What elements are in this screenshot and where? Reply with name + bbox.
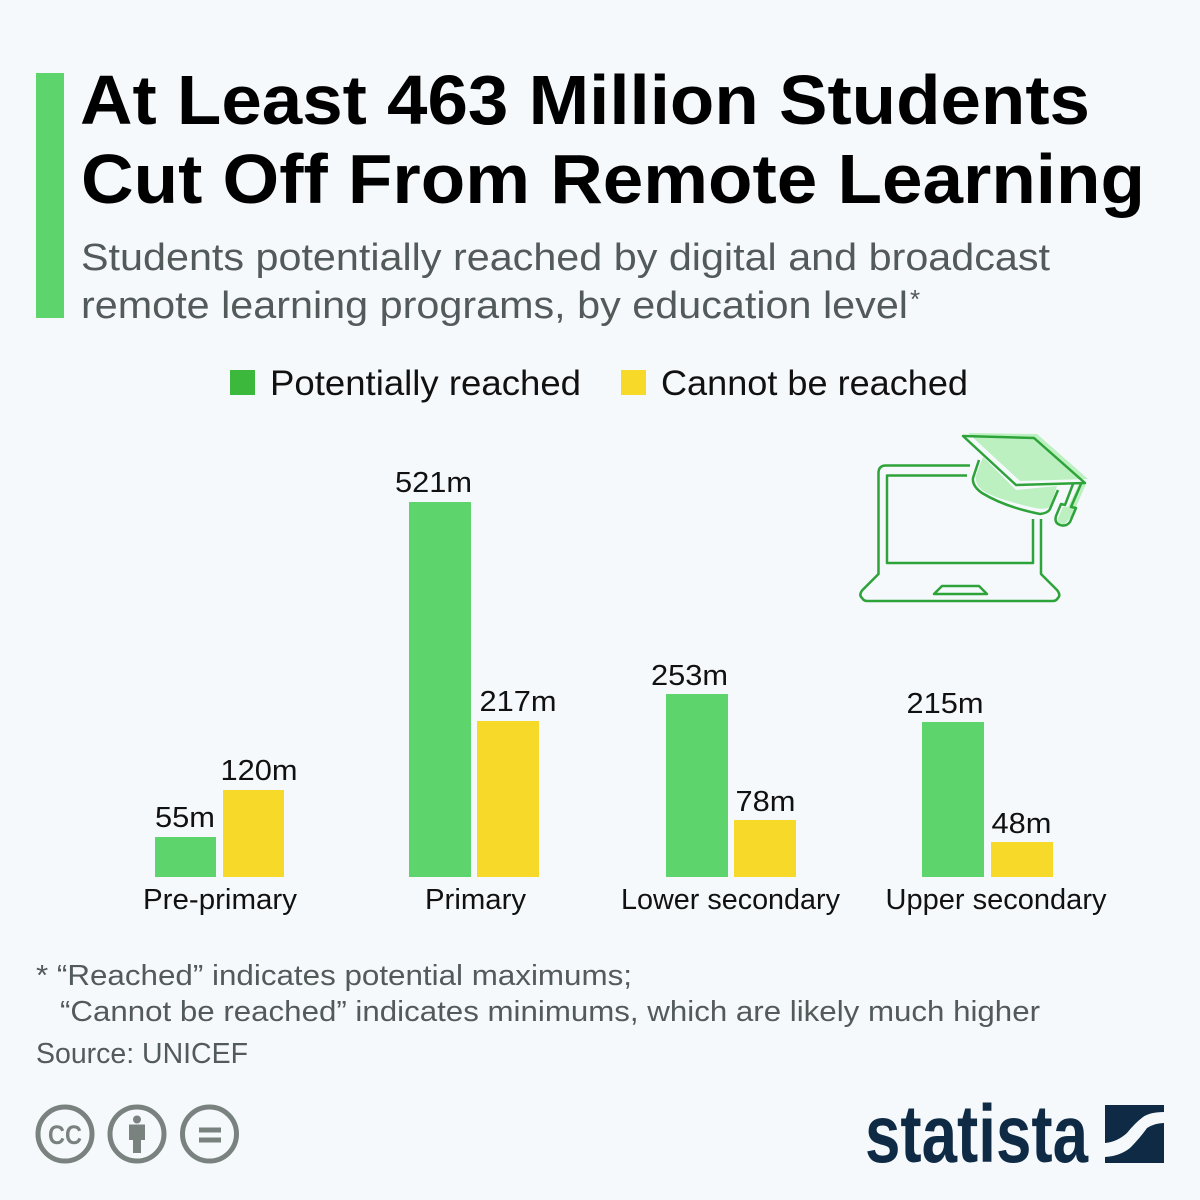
icon: creative commons licence bbox=[38, 1107, 236, 1161]
group: upper secondary: Upper secondary bbox=[886, 884, 1107, 916]
title bbox=[80, 61, 1145, 218]
group: pre-primary: 120m bbox=[220, 755, 298, 787]
group: lower secondary bbox=[621, 660, 840, 916]
footnote: * “Reached” indicates potential maximums; bbox=[36, 960, 632, 992]
group: pre-primary: 55m bbox=[155, 802, 215, 834]
title: Cut Off From Remote Learning bbox=[81, 140, 1145, 218]
group: primary bbox=[395, 467, 556, 916]
subtitle: Students potentially reached by digital and broadcast bbox=[81, 237, 1050, 279]
subtitle: remote learning programs, by education level bbox=[81, 285, 908, 327]
group: upper secondary: 48m bbox=[992, 808, 1052, 840]
legend: Cannot be reached bbox=[661, 364, 968, 403]
group: lower secondary: 253m bbox=[651, 660, 728, 692]
icon: creative commons licence: CC bbox=[48, 1120, 82, 1150]
footnote bbox=[36, 960, 1040, 1028]
icon: laptop with graduation cap bbox=[860, 433, 1088, 601]
group: pre-primary bbox=[143, 755, 298, 916]
bar chart bbox=[143, 467, 1107, 916]
logo: statista: statista bbox=[865, 1089, 1089, 1180]
group: lower secondary: Lower secondary bbox=[621, 884, 840, 916]
subtitle bbox=[81, 237, 1050, 327]
group: upper secondary: 215m bbox=[906, 688, 984, 720]
subtitle: * bbox=[910, 284, 920, 314]
legend: Potentially reached bbox=[270, 364, 581, 403]
group: primary: Primary bbox=[425, 884, 527, 916]
title: At Least 463 Million Students bbox=[80, 61, 1090, 139]
source: Source: UNICEF bbox=[36, 1038, 248, 1070]
legend bbox=[230, 364, 968, 403]
footnote: “Cannot be reached” indicates minimums, which are likely much higher bbox=[60, 996, 1040, 1028]
group: pre-primary: Pre-primary bbox=[143, 884, 297, 916]
group: lower secondary: 78m bbox=[736, 786, 796, 818]
group: upper secondary bbox=[886, 688, 1107, 916]
group: primary: 521m bbox=[395, 467, 472, 499]
group: primary: 217m bbox=[480, 686, 556, 718]
title accent bar bbox=[36, 73, 64, 318]
